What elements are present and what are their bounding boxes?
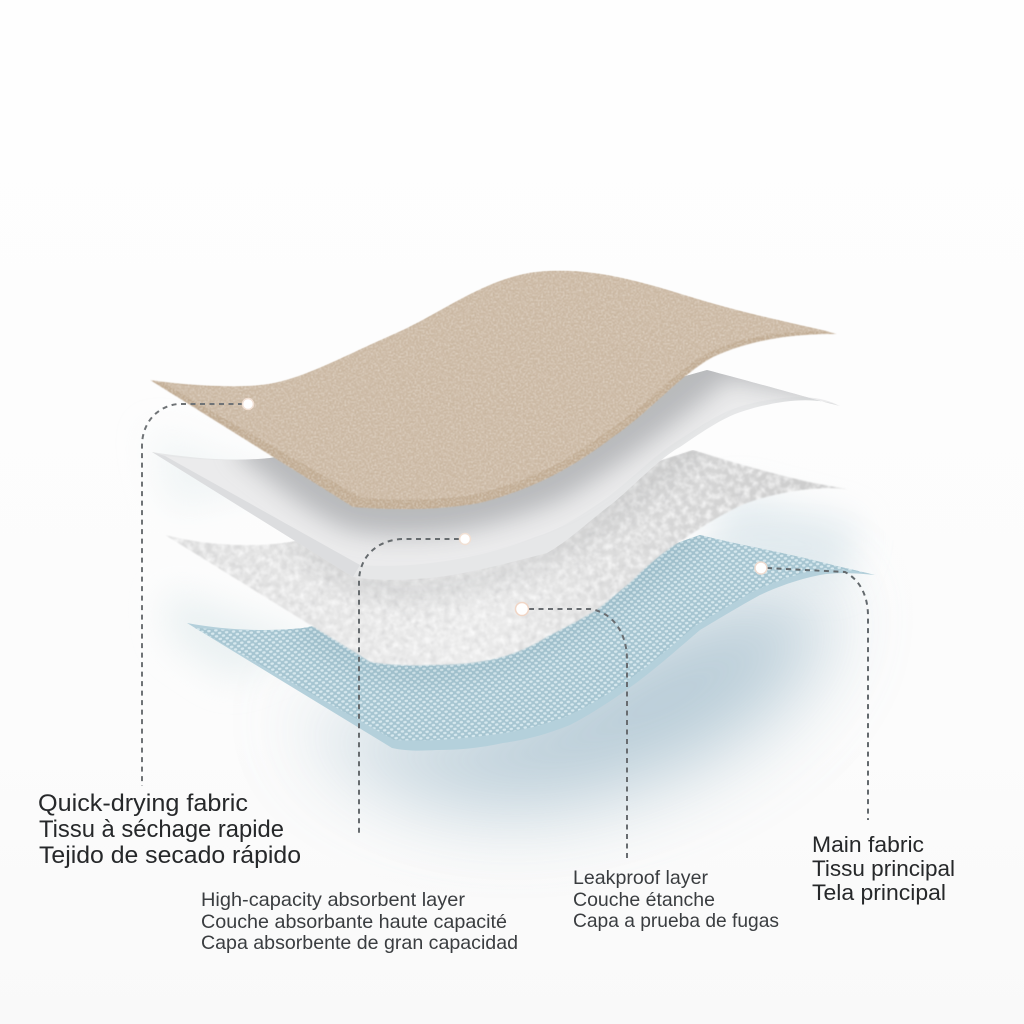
leader: main fabric [755, 562, 868, 820]
shadow cast by absorbent layer [300, 530, 700, 672]
beige edge [150, 271, 837, 509]
layer: white leakproof film [152, 370, 839, 580]
shadow cast by white layer [290, 440, 700, 590]
label: quick-drying fabric [38, 790, 301, 869]
dashed line [529, 609, 627, 860]
label: main fabric [812, 832, 955, 905]
layer: grey absorbent [165, 440, 853, 666]
label: leakproof layer: Leakproof layer [573, 867, 709, 889]
label: main fabric: Tissu principal [812, 856, 955, 881]
label: high-capacity absorbent layer [201, 889, 518, 954]
label: quick-drying fabric: Tejido de secado rápido [39, 842, 301, 869]
marker dot [755, 562, 767, 574]
leader: high-capacity absorbent layer [359, 534, 470, 835]
absorbent body [165, 450, 853, 666]
marker dot [242, 398, 254, 410]
dashed line [359, 539, 459, 835]
leader: leakproof layer [516, 602, 627, 860]
film top surface [165, 370, 838, 566]
layer: blue main fabric [187, 530, 875, 751]
blue glow under the layers [150, 430, 860, 808]
label: high-capacity absorbent layer: Couche absorbante haute capacité [201, 911, 507, 933]
label: leakproof layer: Capa a prueba de fugas [573, 910, 779, 932]
film bottom rim [152, 452, 360, 577]
label: main fabric: Main fabric [812, 832, 924, 857]
label: main fabric: Tela principal [812, 880, 946, 905]
leader: quick-drying fabric [142, 398, 254, 786]
blue fabric body [187, 535, 875, 751]
beige top surface [163, 271, 830, 500]
blue fabric weave surface [195, 535, 875, 741]
shadow cast by beige layer [250, 350, 860, 509]
film edge and surface [152, 370, 840, 580]
layer: beige quick-drying fabric [150, 271, 837, 509]
label: quick-drying fabric: Tissu à séchage rapide [39, 816, 284, 843]
dashed line [142, 404, 243, 786]
label: quick-drying fabric: Quick-drying fabric [38, 790, 248, 817]
marker dot [516, 602, 528, 616]
label: high-capacity absorbent layer: High-capacity absorbent layer [201, 889, 466, 911]
label: high-capacity absorbent layer: Capa absorbente de gran capacidad [201, 932, 518, 954]
label: leakproof layer [573, 867, 779, 932]
marker dot [460, 534, 470, 544]
dashed line [767, 568, 868, 820]
label: leakproof layer: Couche étanche [573, 889, 715, 911]
